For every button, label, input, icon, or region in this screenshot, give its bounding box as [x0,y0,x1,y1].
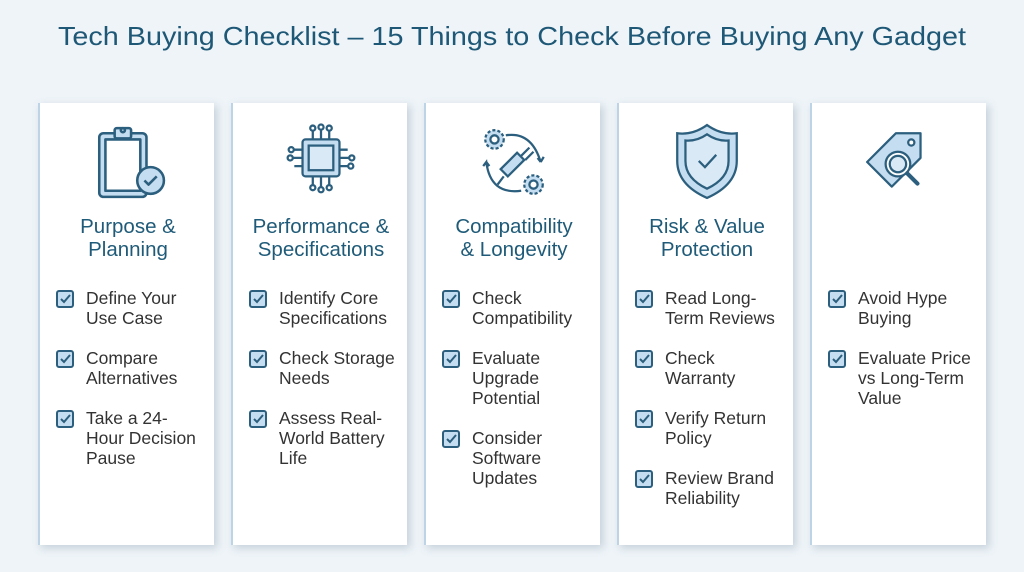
heading [455,215,573,261]
checklist: Evaluate Price [858,348,971,368]
icon: plug with gears [482,129,545,195]
checklist: Identify Core [279,288,378,308]
checklist [442,288,572,488]
checklist: Consider [472,428,542,448]
icon: chip [286,123,356,194]
checklist: Upgrade [472,368,539,388]
checklist: Check [665,348,715,368]
checklist: Read Long- [665,288,756,308]
checklist: Verify Return [665,408,766,428]
checklist: Warranty [665,368,735,388]
heading: Risk & Value [649,215,765,238]
checklist: Alternatives [86,368,177,388]
checklist: Pause [86,448,136,468]
checklist: Check Storage [279,348,395,368]
checklist: Assess Real- [279,408,382,428]
checklist: Check [472,288,522,308]
checklist: Specifications [279,308,387,328]
checklist [635,288,775,508]
checklist: Use Case [86,308,163,328]
heading: & Longevity [460,238,568,261]
checklist: Compare [86,348,158,368]
checklist: Updates [472,468,537,488]
checklist [249,288,395,468]
panel: performance & specifications [231,103,407,545]
heading: Compatibility [455,215,573,238]
heading [80,215,176,261]
title: Tech Buying Checklist – 15 Things to Check Before Buying Any Gadget [58,21,967,51]
checklist: Avoid Hype [858,288,947,308]
panel: price value [810,103,986,545]
heading: Purpose & [80,215,176,238]
panel: risk & value protection [617,103,793,545]
checklist: Review Brand [665,468,774,488]
heading: Performance & [253,215,389,238]
checklist: Software [472,448,541,468]
icon: price tag with magnifier [866,132,922,188]
checklist: vs Long-Term [858,368,964,388]
checklist: World Battery [279,428,385,448]
checklist: Buying [858,308,912,328]
checklist: Take a 24- [86,408,168,428]
checklist: Needs [279,368,330,388]
checklist [828,288,971,408]
heading: Planning [88,238,168,261]
checklist: Life [279,448,307,468]
icon: clipboard [98,126,166,198]
heading: Specifications [258,238,384,261]
checklist: Hour Decision [86,428,196,448]
heading [253,215,389,261]
checklist: Evaluate [472,348,540,368]
panel: purpose & planning [38,103,214,545]
checklist: Define Your [86,288,176,308]
heading [649,215,765,261]
panel: compatibility & longevity [424,103,600,545]
checklist: Reliability [665,488,740,508]
checklist: Term Reviews [665,308,775,328]
checklist: Potential [472,388,540,408]
heading: Protection [661,238,753,261]
checklist [56,288,196,468]
icon: shield [676,124,738,200]
checklist: Compatibility [472,308,572,328]
checklist: Policy [665,428,712,448]
checklist: Value [858,388,901,408]
